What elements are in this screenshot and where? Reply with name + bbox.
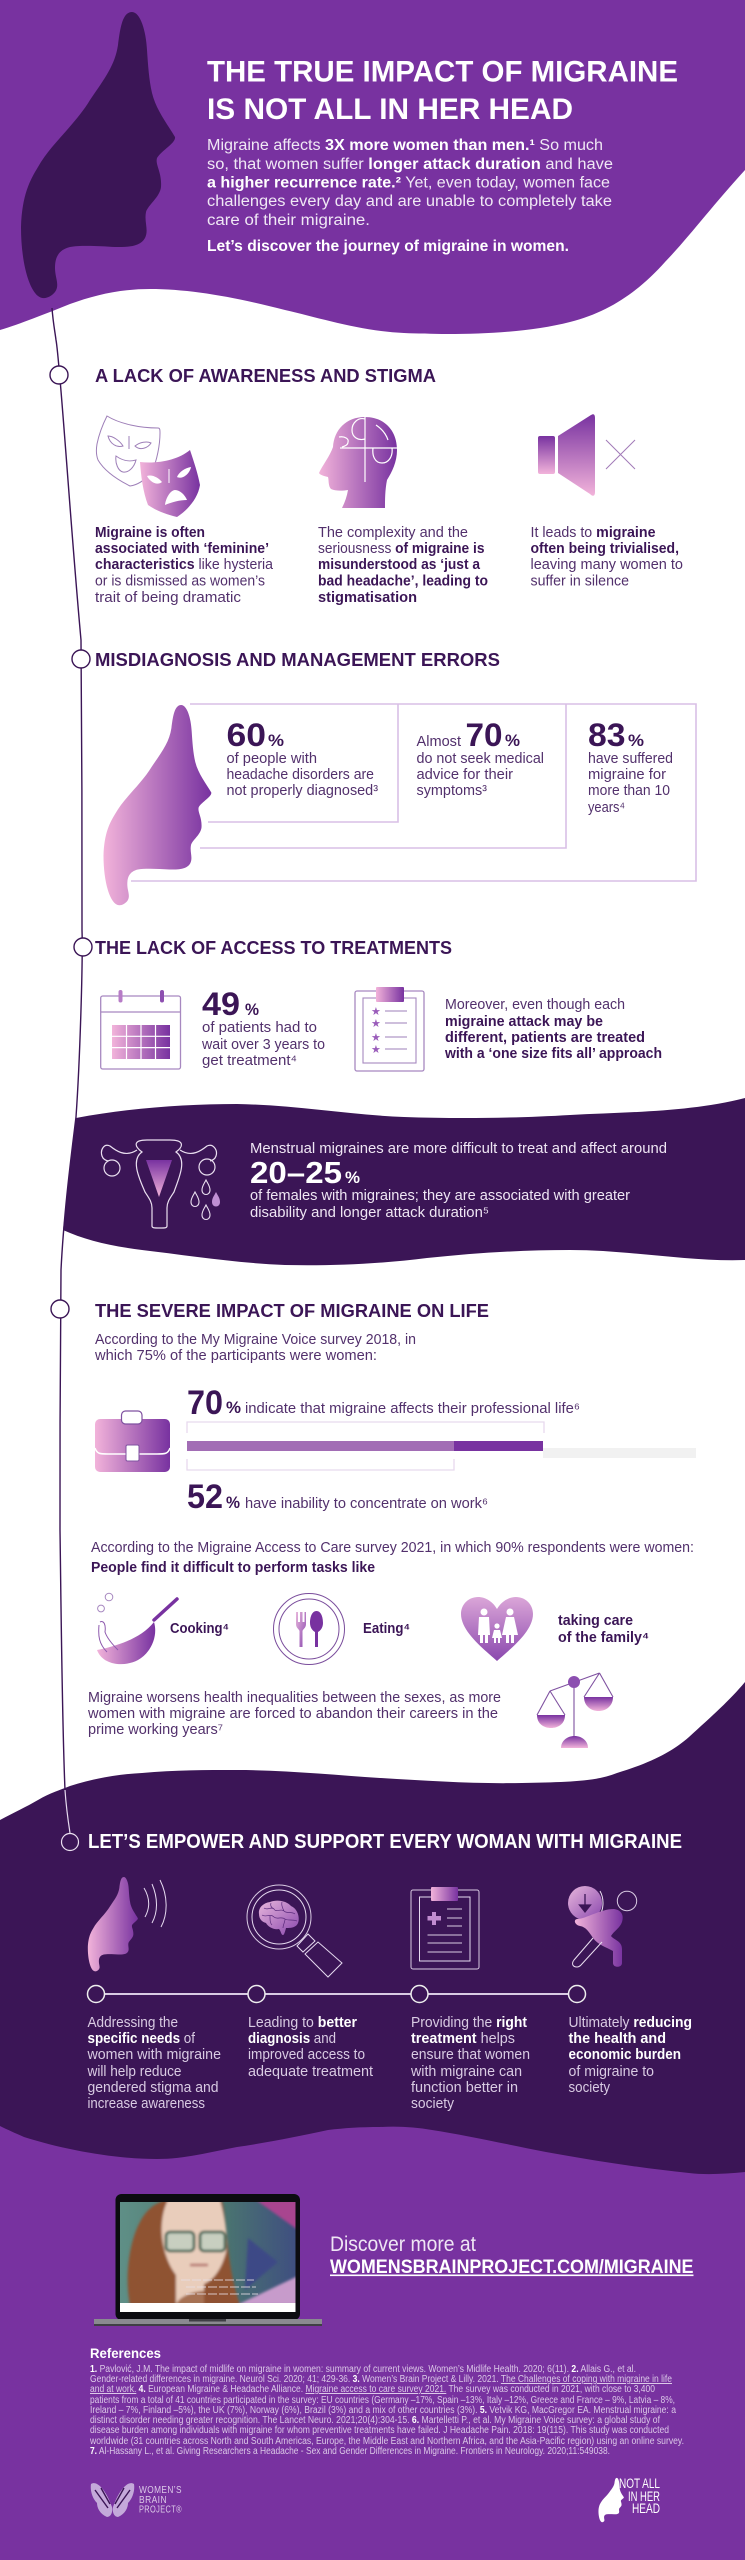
stat: 52 percent concentrate: 52 xyxy=(187,1478,223,1516)
nested stat frames xyxy=(131,704,696,881)
timeline line, upper part xyxy=(52,308,82,1790)
references: Ireland – 7%, Finland –5%), the UK (7%), Norway (6%), Brazil (3%) and a mix of other countries (3%). 5. Vetvik KG, MacGregor EA. Menstrual migraine: a xyxy=(90,2405,676,2416)
references: Gender-related differences in migraine. Neurol Sci. 2020; 41; 429-36. 3. Women’s Brain Project & Lilly. 2021. The Challenges of coping with migraine in life xyxy=(90,2374,672,2385)
logo: women's brain project: PROJECT® xyxy=(139,2504,182,2516)
text: menstrual migraines stat: of females with migraines; they are associated with greater xyxy=(250,1188,630,1204)
timeline node xyxy=(50,366,68,384)
stat: 83 percent: have suffered xyxy=(588,751,673,767)
text: my migraine voice survey: which 75% of the participants were women: xyxy=(94,1348,377,1364)
text: addressing needs: increase awareness xyxy=(88,2096,205,2112)
text: one size fits all xyxy=(444,997,662,1062)
stat: 49 percent xyxy=(201,986,325,1069)
icon: balance scale xyxy=(537,1673,613,1748)
section: let's empower and support xyxy=(62,1831,692,2112)
journey line with nodes xyxy=(88,1986,586,2002)
stat: 49 percent: get treatment⁴ xyxy=(202,1053,297,1069)
text: addressing needs xyxy=(87,2015,221,2112)
text: feminine characteristics: Migraine is often xyxy=(95,525,205,541)
title: THE TRUE IMPACT OF MIGRAINE xyxy=(207,56,678,89)
text: trivialised: It leads to migraine xyxy=(530,525,656,541)
icon: cooking pan xyxy=(97,1593,177,1664)
text: misunderstood as headache: seriousness of migraine is xyxy=(318,541,484,557)
icon: speaking face xyxy=(88,1877,166,1971)
stat: 70 percent: 70 xyxy=(466,717,502,753)
text: my migraine voice survey: According to the My Migraine Voice survey 2018, in xyxy=(95,1332,416,1348)
section: a lack of awareness and stigma xyxy=(50,365,683,606)
stat: 70 percent: do not seek medical xyxy=(416,751,544,767)
logo: not all in her head: NOT ALL xyxy=(619,2476,660,2491)
text: addressing needs: specific needs of xyxy=(88,2031,196,2047)
heading: THE SEVERE IMPACT OF MIGRAINE ON LIFE xyxy=(95,1300,489,1321)
intro text: so, that women suffer longer attack duration and have xyxy=(207,156,613,173)
stat: 60 percent xyxy=(226,717,378,799)
text: misunderstood as headache xyxy=(318,525,488,606)
stat: 70 percent professional life xyxy=(187,1384,580,1422)
logo: women's brain project xyxy=(91,2483,182,2517)
text: feminine characteristics: associated with ‘feminine’ xyxy=(95,541,269,557)
text: health inequalities: women with migraine are forced to abandon their careers in the xyxy=(87,1706,498,1722)
stat: 83 percent: 83 xyxy=(588,717,626,753)
icon: plate with cutlery xyxy=(274,1594,344,1664)
stat: 60 percent: not properly diagnosed³ xyxy=(226,783,378,799)
icon: theatre masks xyxy=(96,416,200,517)
timeline node xyxy=(51,1300,69,1318)
text: better diagnosis: adequate treatment xyxy=(248,2064,373,2080)
label: taking care of the family: of the family⁴ xyxy=(558,1630,649,1646)
logo: women's brain project: WOMEN’S xyxy=(139,2485,182,2496)
text: migraine access to care survey: According to the Migraine Access to Care survey 2021, in which 90% respondents were women: xyxy=(91,1540,694,1556)
stat: 60 percent: of people with xyxy=(226,751,317,767)
stat: 49 percent: 49 xyxy=(202,986,240,1022)
section: misdiagnosis and management errors xyxy=(72,649,696,905)
text: menstrual migraines stat: Menstrual migraines are more difficult to treat and affect around xyxy=(250,1141,667,1157)
references: and at work. 4. European Migraine & Headache Alliance. Migraine access to care survey 2021. The survey was conducted in 2021, with close to 3,400 xyxy=(90,2384,655,2395)
discover more call to action xyxy=(330,2233,694,2278)
stat: 83 percent: years⁴ xyxy=(588,800,625,816)
text: right treatment: function better in xyxy=(411,2080,518,2096)
text: reducing burden: of migraine to xyxy=(568,2064,654,2080)
text: right treatment: with migraine can xyxy=(410,2064,522,2080)
stat: 49 percent: wait over 3 years to xyxy=(201,1037,325,1053)
stat: 70 percent: % xyxy=(505,731,520,750)
intro text: Migraine affects 3X more women than men.¹ So much xyxy=(207,137,603,154)
text: migraine access to care survey xyxy=(91,1540,694,1576)
text: better diagnosis: improved access to xyxy=(248,2047,365,2063)
stat: 70 percent: symptoms³ xyxy=(416,783,487,799)
references: 1. Pavlović, J.M. The impact of midlife on migraine in women: summary of current views. Women’s Midlife Health. 2020; 6(11). 2. Allais G., et al. xyxy=(90,2364,636,2375)
text: trivialised: leaving many women to xyxy=(530,557,683,573)
intro text xyxy=(207,137,613,255)
icon: clipboard checklist xyxy=(355,987,424,1071)
text: misunderstood as headache: The complexity and the xyxy=(318,525,468,541)
laptop mockup xyxy=(94,2194,322,2326)
icon: briefcase xyxy=(95,1411,170,1472)
bar chart xyxy=(187,1422,696,1470)
dark panel: empower section xyxy=(0,1682,745,2174)
timeline node xyxy=(62,1834,78,1850)
icon: muted speaker xyxy=(538,414,635,496)
stat: 83 percent: migraine for xyxy=(588,767,666,783)
icon: medical clipboard xyxy=(411,1887,479,1969)
timeline node xyxy=(74,938,92,956)
section: the severe impact of migraine on life xyxy=(51,1300,696,1748)
references: References xyxy=(90,2345,161,2361)
stat: 70 percent professional life: indicate that migraine affects their professional life⁶ xyxy=(245,1401,580,1417)
text: feminine characteristics: characteristics like hysteria xyxy=(95,557,274,573)
title xyxy=(207,56,678,126)
discover more call to action: Discover more at xyxy=(330,2233,476,2256)
menstrual migraine content xyxy=(101,1140,667,1228)
text: health inequalities xyxy=(87,1690,501,1738)
text: feminine characteristics: or is dismissed as women’s xyxy=(95,574,265,590)
icon: uterus xyxy=(101,1140,220,1228)
text: menstrual migraines stat: disability and longer attack duration⁵ xyxy=(250,1205,489,1221)
icon: gradient face xyxy=(104,705,211,905)
heading: THE LACK OF ACCESS TO TREATMENTS xyxy=(95,937,452,958)
text: feminine characteristics: trait of being dramatic xyxy=(95,590,241,606)
text: health inequalities: Migraine worsens health inequalities between the sexes, as more xyxy=(88,1690,501,1706)
section: the lack of access to treatments xyxy=(74,937,662,1071)
text: addressing needs: gendered stigma and xyxy=(88,2080,218,2096)
stat: 52 percent concentrate: % xyxy=(226,1493,240,1512)
references xyxy=(89,2345,684,2457)
label: taking care of the family: taking care xyxy=(558,1613,633,1629)
header purple wave panel xyxy=(0,0,745,334)
footer purple panel xyxy=(0,2100,745,2560)
text: reducing burden: the health and xyxy=(568,2031,666,2047)
text: misunderstood as headache: stigmatisation xyxy=(318,590,417,606)
label: taking care of the family xyxy=(558,1613,649,1646)
text: menstrual migraines stat: % xyxy=(345,1168,360,1187)
stat: 49 percent: % xyxy=(245,1000,259,1019)
intro text: Let’s discover the journey of migraine in women. xyxy=(207,238,569,255)
text: reducing burden: Ultimately reducing xyxy=(568,2015,692,2031)
stat: 60 percent: headache disorders are xyxy=(226,767,374,783)
icon: clipboard checklist: ★ xyxy=(371,1018,381,1030)
stat: 70 percent professional life: 70 xyxy=(187,1384,223,1422)
heading: MISDIAGNOSIS AND MANAGEMENT ERRORS xyxy=(95,649,500,670)
text: migraine access to care survey: People find it difficult to perform tasks like xyxy=(91,1560,375,1576)
text: trivialised xyxy=(530,525,683,590)
text: reducing burden xyxy=(568,2015,692,2096)
text: trivialised: suffer in silence xyxy=(530,574,629,590)
logo: women's brain project: BRAIN xyxy=(139,2495,167,2506)
dark band panel: menstrual migraines xyxy=(63,1098,745,1265)
text: right treatment xyxy=(410,2015,530,2112)
icon: dark face silhouette xyxy=(21,12,175,298)
text: better diagnosis xyxy=(248,2015,373,2080)
text: menstrual migraines stat: 20–25 xyxy=(250,1155,342,1190)
title: IS NOT ALL IN HER HEAD xyxy=(207,93,573,126)
icon: clipboard checklist: ★ xyxy=(371,1044,381,1056)
text: addressing needs: will help reduce xyxy=(87,2064,182,2080)
stat: 49 percent: of patients had to xyxy=(202,1020,317,1036)
text: right treatment: society xyxy=(411,2096,455,2112)
stat: 52 percent concentrate xyxy=(187,1478,488,1516)
text: menstrual migraines stat xyxy=(250,1141,667,1221)
text: reducing burden: economic burden xyxy=(568,2047,681,2063)
text: better diagnosis: Leading to better xyxy=(248,2015,357,2031)
text: one size fits all: different, patients are treated xyxy=(445,1030,645,1046)
intro text: care of their migraine. xyxy=(207,212,370,229)
stat: 52 percent concentrate: have inability to concentrate on work⁶ xyxy=(245,1496,488,1512)
icon: calendar xyxy=(101,990,180,1069)
timeline node xyxy=(72,650,90,668)
logo: not all in her head: HEAD xyxy=(632,2501,660,2516)
text: one size fits all: with a ‘one size fits all’ approach xyxy=(444,1046,662,1062)
stat: 70 percent: Almost xyxy=(416,734,461,750)
text: reducing burden: society xyxy=(568,2080,611,2096)
text: right treatment: treatment helps xyxy=(411,2031,515,2047)
logo: not all in her head xyxy=(598,2476,660,2522)
text: feminine characteristics xyxy=(95,525,274,606)
stat: 70 percent xyxy=(416,717,544,799)
stat: 83 percent xyxy=(588,717,673,816)
references: distinct disorder needing greater recognition. The Lancet Neuro. 2021;20(4):304-15. 6. Martelletti P., et al. My Migraine Voice survey: a global study of xyxy=(90,2415,660,2426)
heading: LET’S EMPOWER AND SUPPORT EVERY WOMAN WITH MIGRAINE xyxy=(88,1831,682,1853)
intro text: a higher recurrence rate.² Yet, even today, women face xyxy=(207,174,610,192)
stat: 70 percent professional life: % xyxy=(226,1398,241,1417)
text: trivialised: often being trivialised, xyxy=(530,541,679,557)
text: right treatment: ensure that women xyxy=(411,2047,530,2063)
icon: clipboard checklist: ★ xyxy=(371,1006,381,1018)
text: right treatment: Providing the right xyxy=(411,2015,527,2031)
text: addressing needs: women with migraine xyxy=(87,2047,221,2063)
label: cooking: Cooking⁴ xyxy=(170,1621,229,1637)
logo: not all in her head: IN HER xyxy=(628,2489,660,2504)
icon: head puzzle xyxy=(319,417,397,508)
text: addressing needs: Addressing the xyxy=(88,2015,178,2031)
text: misunderstood as headache: misunderstood as ‘just a xyxy=(318,557,481,573)
text: health inequalities: prime working years⁷ xyxy=(88,1722,223,1738)
stat: 60 percent: % xyxy=(268,731,284,750)
icon: clipboard checklist: ★ xyxy=(371,1032,381,1044)
stat: 83 percent: % xyxy=(628,731,644,750)
icon: magnifier with brain xyxy=(247,1885,342,1977)
text: my migraine voice survey xyxy=(94,1332,416,1364)
stat: 70 percent: advice for their xyxy=(416,767,513,783)
icon: heart with family xyxy=(461,1597,533,1661)
label: eating: Eating⁴ xyxy=(363,1621,410,1637)
text: misunderstood as headache: bad headache’, leading to xyxy=(318,574,488,590)
heading: A LACK OF AWARENESS AND STIGMA xyxy=(95,365,436,386)
stat: 60 percent: 60 xyxy=(226,717,266,753)
text: one size fits all: migraine attack may be xyxy=(445,1014,603,1030)
references: 7. Al-Hassany L., et al. Giving Researchers a Headache - Sex and Gender Differences in Migraine. Frontiers in Neurology. 2020;11:549038. xyxy=(90,2446,610,2457)
text: better diagnosis: diagnosis and xyxy=(248,2031,336,2047)
intro text: challenges every day and are unable to completely take xyxy=(207,193,612,210)
icon: person carrying burden xyxy=(568,1886,637,1967)
timeline line, lower part on dark xyxy=(65,1790,70,1833)
discover more call to action: WOMENSBRAINPROJECT.COM/MIGRAINE xyxy=(330,2257,694,2278)
stat: 83 percent: more than 10 xyxy=(588,783,670,799)
text: one size fits all: Moreover, even though each xyxy=(445,997,625,1013)
